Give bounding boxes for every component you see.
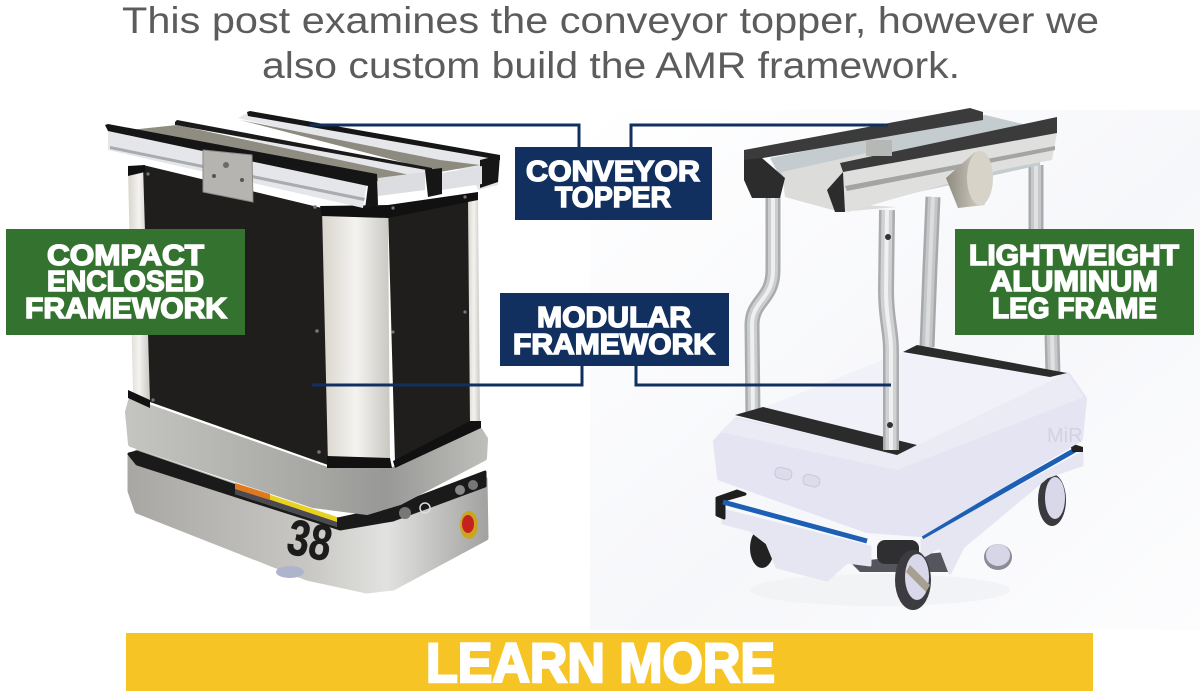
label: lightweight aluminum leg frame: LIGHTWEIGHT bbox=[969, 240, 1179, 272]
black panels bbox=[143, 165, 328, 465]
under body shadow bbox=[850, 552, 950, 572]
label: modular framework: FRAMEWORK bbox=[513, 329, 715, 361]
black deck trays bbox=[735, 407, 917, 455]
back rail bbox=[238, 113, 500, 190]
base bbox=[130, 452, 486, 591]
call to action button: LEARN MORE bbox=[426, 631, 775, 693]
title: also custom build the AMR framework. bbox=[262, 45, 960, 86]
number: 38 bbox=[283, 508, 337, 572]
label: compact enclosed framework: COMPACT bbox=[47, 240, 204, 272]
front caster bbox=[877, 540, 919, 564]
front rail bbox=[108, 130, 367, 208]
front belt bbox=[120, 125, 410, 183]
lower base bbox=[722, 510, 870, 580]
label: lightweight aluminum leg frame bbox=[955, 229, 1194, 335]
label: lightweight aluminum leg frame: LEG FRAME bbox=[992, 293, 1157, 325]
photo: enclosed conveyor robot bbox=[105, 111, 500, 591]
photo: open leg-frame robot bbox=[717, 108, 1084, 610]
mounting plate bbox=[203, 150, 253, 202]
connector: modular framework bbox=[312, 366, 891, 385]
knob bbox=[946, 152, 985, 208]
label: modular framework bbox=[500, 293, 729, 366]
rear wheels bbox=[1038, 474, 1066, 526]
label: conveyor topper bbox=[515, 147, 712, 220]
background of right photo bbox=[590, 110, 1200, 630]
emergency button bbox=[460, 511, 478, 539]
label: conveyor topper: CONVEYOR bbox=[526, 156, 700, 188]
top conveyor bbox=[770, 115, 1040, 205]
label: modular framework: MODULAR bbox=[537, 302, 691, 334]
connector: conveyor topper bbox=[310, 125, 888, 147]
title bbox=[122, 0, 1099, 86]
call to action button bbox=[126, 631, 1093, 693]
title: This post examines the conveyor topper, however we bbox=[122, 0, 1099, 41]
screws bbox=[146, 172, 467, 454]
warning label bbox=[235, 483, 337, 527]
label: compact enclosed framework: FRAMEWORK bbox=[25, 293, 227, 325]
photo: open leg-frame robot: MiR bbox=[1047, 425, 1083, 447]
body bbox=[717, 376, 1083, 533]
upper ring bbox=[128, 401, 485, 512]
columns bbox=[128, 168, 150, 400]
label: compact enclosed framework: ENCLOSED bbox=[47, 266, 204, 298]
label: conveyor topper: TOPPER bbox=[555, 182, 671, 214]
middle rail bbox=[175, 120, 430, 178]
label: lightweight aluminum leg frame: ALUMINUM bbox=[990, 266, 1158, 298]
front leg bbox=[886, 210, 891, 450]
legs bbox=[752, 165, 1053, 417]
label: compact enclosed framework bbox=[6, 229, 245, 335]
